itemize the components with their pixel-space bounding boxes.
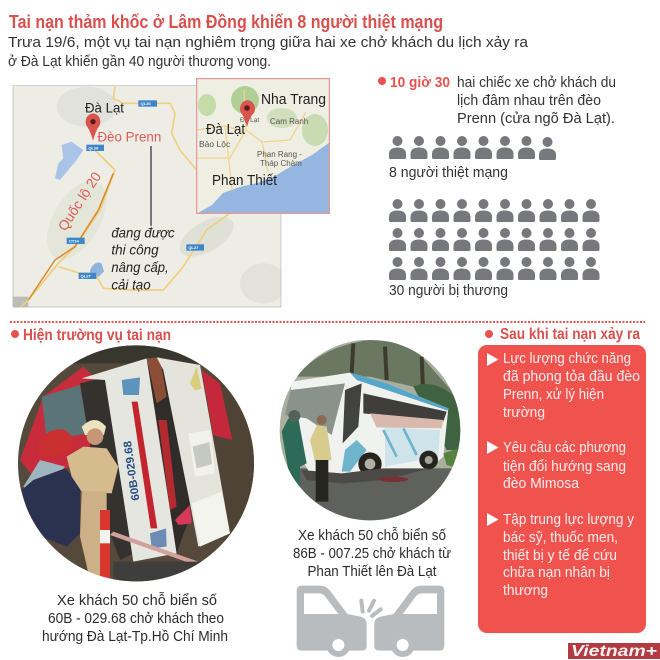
caption: bus 86B (293, 527, 451, 580)
item: rerouting vehicles: tiện đổi hướng sang (503, 458, 626, 475)
intro text: Trưa 19/6, một vụ tai nạn nghiêm trọng giữa hai xe chở khách du lịch xảy ra (8, 34, 529, 51)
map: Đèo Prenn area: QL20 (88, 145, 99, 150)
heading: accident scene: Hiện trường vụ tai nạn (23, 327, 171, 344)
item: medical rescue: bác sỹ, thuốc men, (503, 529, 618, 546)
map note (111, 224, 175, 292)
inset map: southern Vietnam: Bảo Lộc (199, 139, 231, 149)
item: medical rescue: thiết bị y tế để cứu (503, 547, 617, 564)
map note: thi công (111, 242, 159, 258)
item: rerouting vehicles (487, 439, 626, 492)
photo: overturned bus (13, 340, 260, 587)
map pin (86, 113, 100, 141)
caption: bus 86B: 86B - 007.25 chở khách từ (293, 546, 451, 562)
caption: bus 60B (42, 592, 228, 645)
inset label: Nha Trang: Nha Trang (261, 91, 326, 108)
inset map: southern Vietnam: Cam Ranh (270, 117, 308, 126)
inset map: southern Vietnam: Tháp Chàm (260, 159, 302, 168)
annotation line (150, 146, 152, 226)
inset label: Đà Lạt: Đà Lạt (206, 121, 246, 138)
logo: Vietnam+: Vietnam+ (571, 643, 657, 660)
accident description: lịch đâm nhau trên đèo (457, 92, 601, 109)
time bullet: 10 giờ 30 (390, 74, 450, 91)
accident description (457, 74, 616, 127)
item: medical rescue: thương (503, 582, 548, 599)
label: 8 dead: 8 người thiệt mạng (389, 164, 508, 181)
label: 30 injured: 30 người bị thương (389, 282, 508, 299)
item: sealing the pass (487, 350, 640, 421)
caption: bus 86B: Phan Thiết lên Đà Lạt (308, 564, 436, 580)
item: rerouting vehicles: Yêu cầu các phương (503, 439, 626, 456)
photo: overturned bus: 60B-029.68 (122, 440, 142, 501)
item: sealing the pass: đã phong tỏa đầu đèo (503, 368, 640, 385)
map: Đèo Prenn area: QL27 (81, 273, 91, 278)
heading: after the accident: Sau khi tai nạn xảy ra (500, 326, 640, 343)
item: sealing the pass: Prenn, xử lý hiện (503, 386, 604, 403)
item: rerouting vehicles: đèo Mimosa (503, 475, 580, 492)
map label: Quốc lộ 20: Quốc lộ 20 (54, 169, 104, 234)
map note: nâng cấp, (111, 259, 169, 275)
icons: 8 dead (389, 136, 556, 160)
caption: bus 60B: 60B - 029.68 chở khách theo (48, 611, 224, 627)
icons: 30 injured (389, 199, 600, 280)
map: Đèo Prenn area: CT14 (69, 238, 80, 243)
caption: bus 60B: hướng Đà Lạt-Tp.Hồ Chí Minh (42, 629, 228, 645)
accident description: Prenn (cửa ngõ Đà Lạt). (457, 110, 615, 127)
item: sealing the pass: Lực lượng chức năng (503, 350, 631, 367)
accident description: hai chiếc xe chở khách du (457, 74, 616, 91)
inset map: southern Vietnam: Đà Lạt (240, 117, 259, 124)
item: sealing the pass: trường (503, 404, 545, 421)
intro text (8, 34, 529, 70)
item: medical rescue (487, 511, 634, 599)
map: Đèo Prenn area (13, 85, 287, 307)
icon: two cars colliding (297, 586, 444, 657)
intro text: ở Đà Lạt khiến gần 40 người thương vong. (8, 53, 271, 70)
panel: after the accident (478, 345, 646, 633)
photo: damaged bus (277, 340, 463, 528)
map: Đèo Prenn area: QL20 (141, 101, 151, 106)
title: Tai nạn thảm khốc ở Lâm Đồng khiến 8 người thiệt mạng (9, 12, 443, 32)
map: Đèo Prenn area: QL27 (188, 245, 199, 250)
item: medical rescue: Tập trung lực lượng y (503, 511, 634, 528)
map note: cải tạo (111, 276, 151, 292)
item: medical rescue: chữa nạn nhân bị (503, 564, 610, 581)
caption: bus 60B: Xe khách 50 chỗ biển số (57, 592, 217, 609)
inset map: southern Vietnam (196, 78, 330, 214)
inset label: Phan Thiết: Phan Thiết (212, 172, 278, 189)
caption: bus 86B: Xe khách 50 chỗ biển số (298, 527, 446, 544)
map label: Đà Lạt: Đà Lạt (85, 99, 124, 115)
inset pin (240, 100, 255, 127)
map label: Đèo Prenn: Đèo Prenn (97, 129, 161, 145)
map note: đang được (111, 224, 175, 240)
inset map: southern Vietnam: Phan Rang - (257, 150, 302, 159)
